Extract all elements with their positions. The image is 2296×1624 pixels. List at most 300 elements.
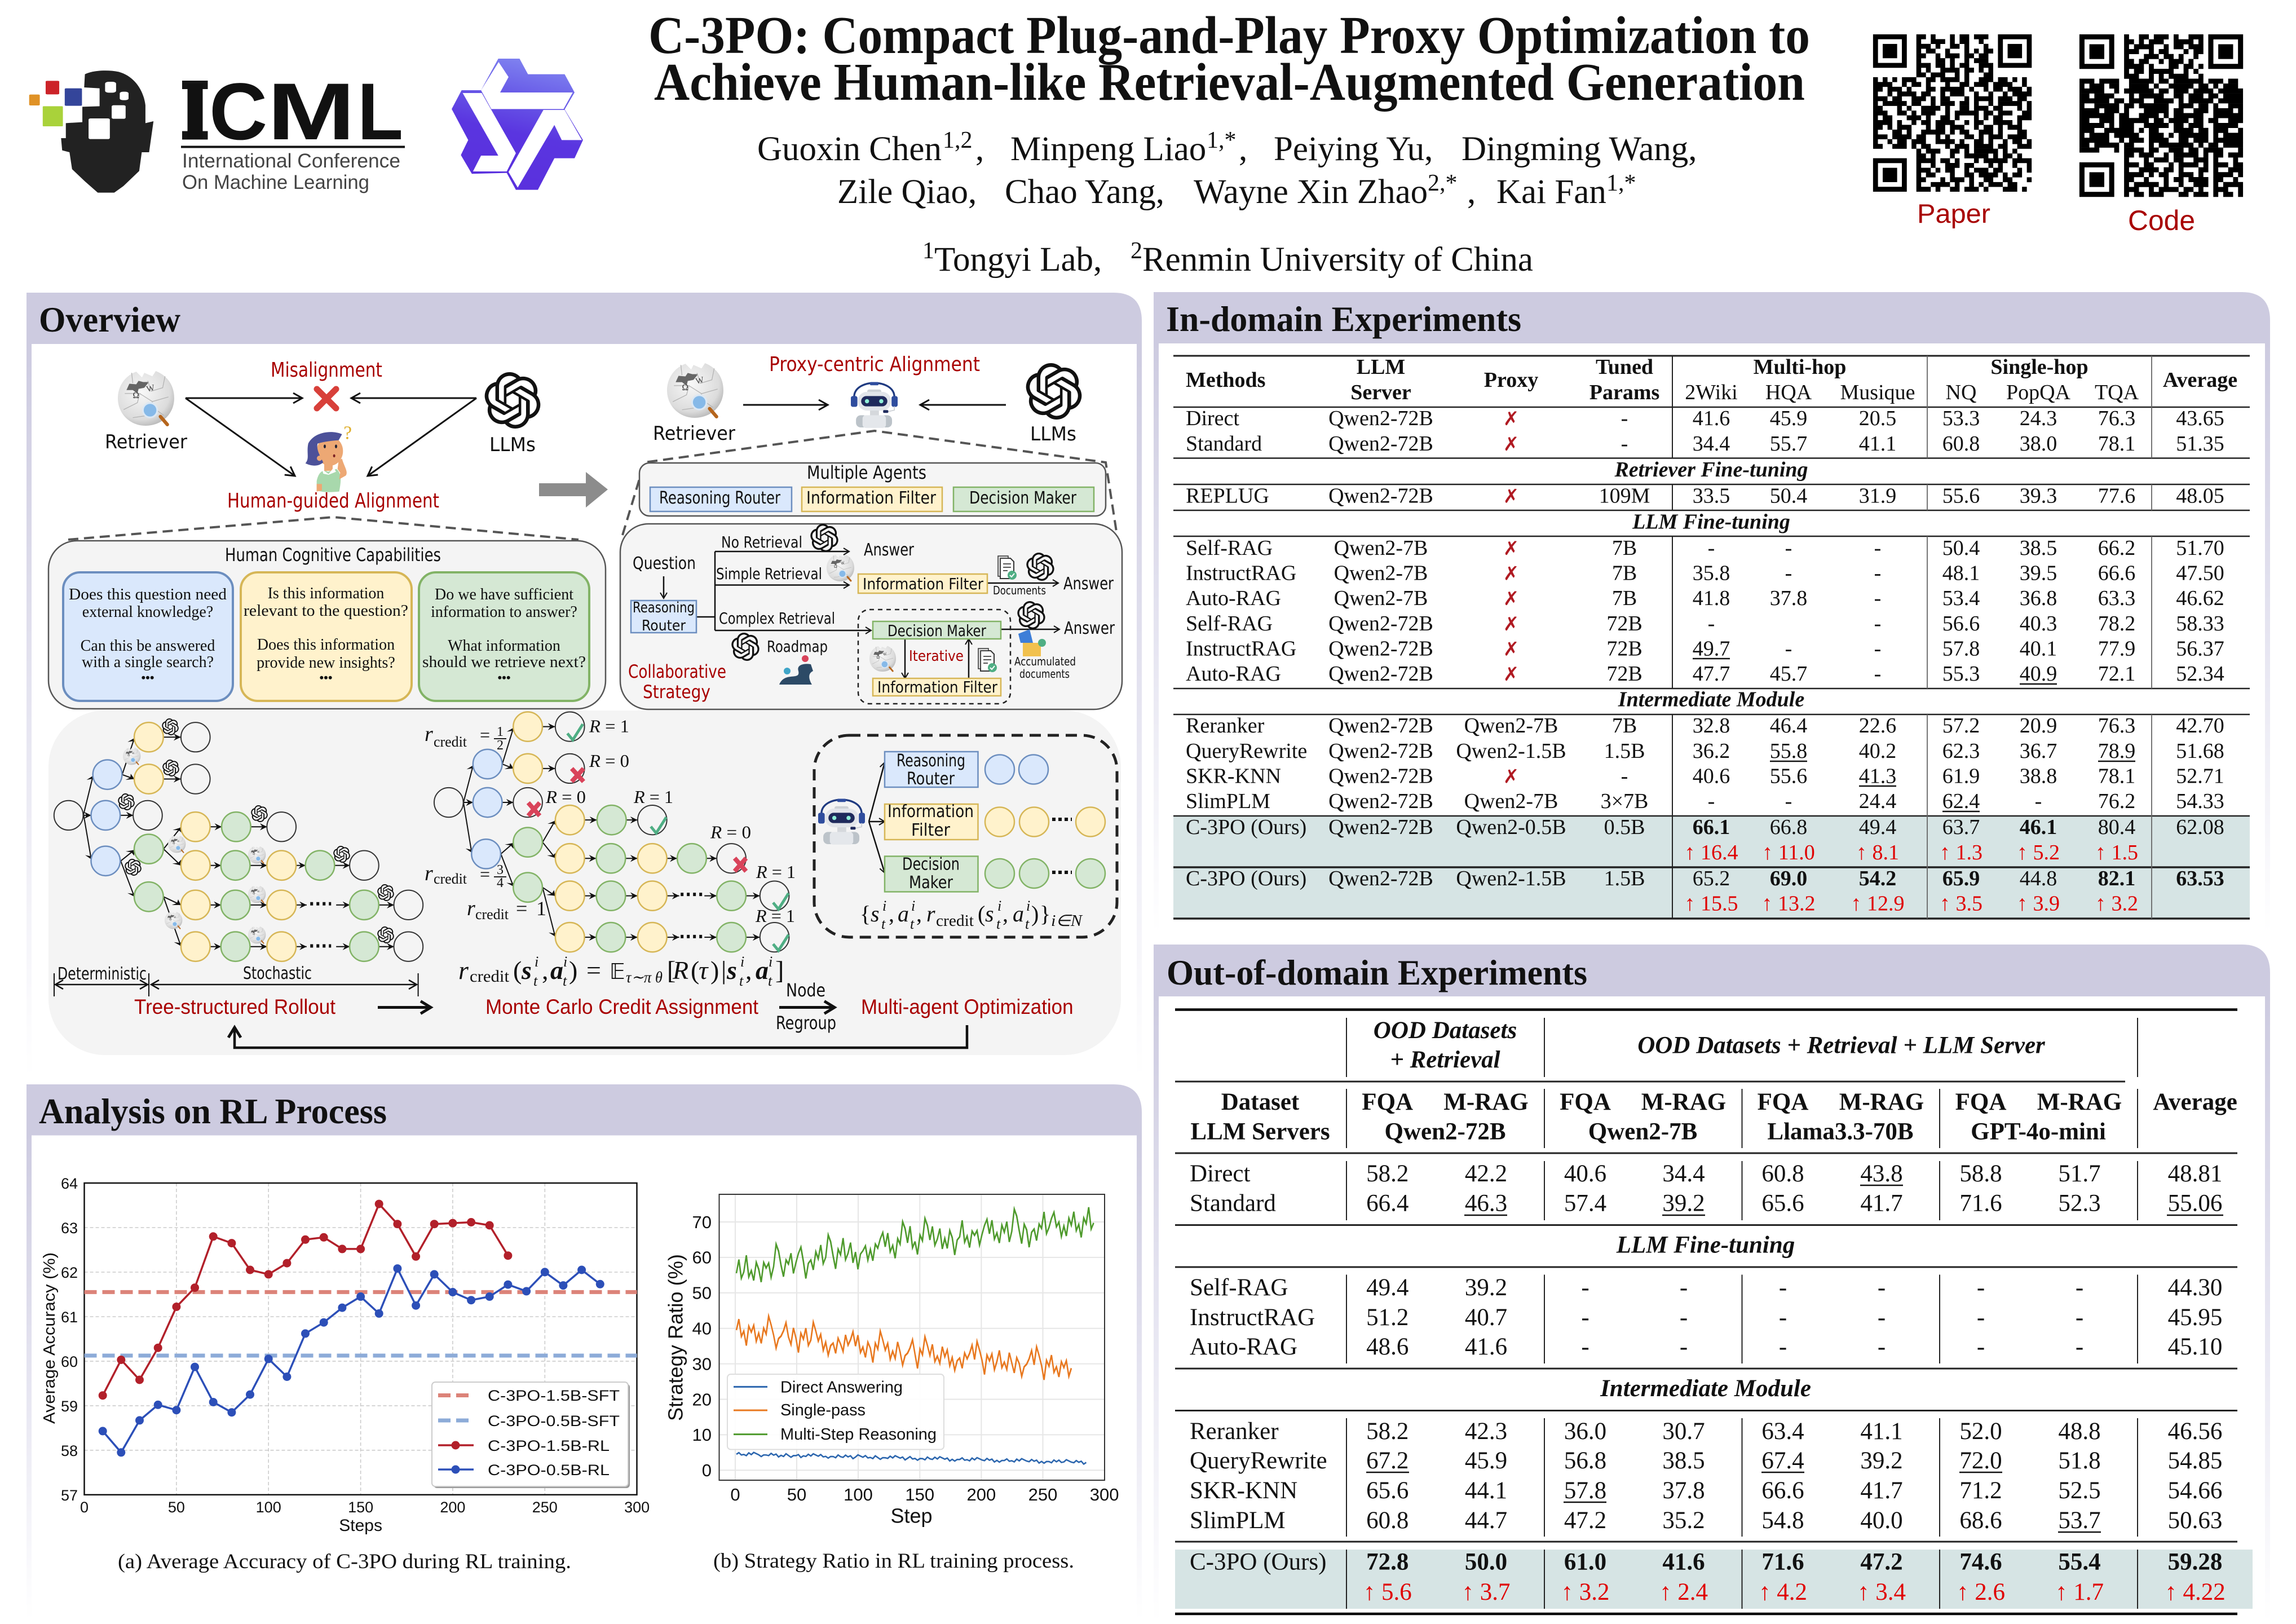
- rows: LLM fine-tuning: -: [1874, 562, 1881, 585]
- rows: LLM fine-tuning: 38.5: [2020, 536, 2057, 560]
- rows: LLM fine-tuning: 48.1: [1942, 562, 1980, 585]
- table: out-of-domain: [1175, 1009, 2253, 1614]
- row: C-3PO 1.5B: ↑ 3.9: [2017, 892, 2060, 916]
- row: C-3PO 0.5B: ↑ 1.3: [1940, 841, 1982, 864]
- rows: LLM fine-tuning: Qwen2-7B: [1334, 586, 1428, 610]
- rows: LLM fine-tuning: 72B: [1606, 662, 1642, 686]
- rows: baselines: 58.2: [1366, 1160, 1408, 1187]
- dashed callout right: [622, 431, 1117, 535]
- rows: baselines: 41.6: [1693, 407, 1730, 430]
- label: accumulated documents: [1014, 655, 1076, 681]
- rows: intermediate module: 53.7: [2058, 1507, 2101, 1534]
- affiliations: [922, 238, 1533, 279]
- rows: LLM fine-tuning: -: [1785, 536, 1792, 560]
- title: C-3PO: Compact Plug-and-Play Proxy Optimization to: [648, 6, 1810, 65]
- table column headers: Average: [2153, 1089, 2237, 1115]
- row: C-3PO 1.5B: 65.2: [1693, 867, 1730, 890]
- formula: agent data: ,: [1003, 901, 1008, 926]
- card: yellow: Does this information: [257, 636, 395, 654]
- box: reasoning router: Router: [907, 769, 955, 789]
- authors: ,: [1239, 130, 1247, 168]
- rows: LLM fine-tuning: ✗: [1503, 537, 1519, 560]
- formula: monte carlo credit: s: [521, 956, 532, 985]
- table header: Average: [2163, 368, 2237, 392]
- formula: agent data: a: [1013, 901, 1024, 926]
- formula: monte carlo credit: |: [721, 956, 726, 985]
- rows: baselines: 53.3: [1942, 407, 1980, 430]
- formula: monte carlo credit: i: [535, 954, 538, 970]
- rows: intermediate module: SlimPLM: [1190, 1507, 1286, 1534]
- rows: LLM fine-tuning: 72B: [1606, 612, 1642, 636]
- legend: strategies: [727, 1374, 944, 1449]
- rows: baselines: 45.9: [1770, 407, 1807, 430]
- row: REPLUG: 109M: [1599, 484, 1650, 508]
- label: accumulated documents: Accumulated: [1014, 655, 1076, 668]
- row: C-3PO 1.5B: 1.5B: [1604, 867, 1645, 890]
- formula: monte carlo credit: t: [563, 973, 567, 989]
- icon: documents lower: [978, 648, 997, 672]
- card: blue: external knowledge?: [82, 603, 213, 621]
- rows: LLM fine-tuning: -: [1878, 1274, 1886, 1301]
- authors: 1,2: [943, 127, 972, 153]
- baseline: 1.5B SFT: [85, 1290, 637, 1294]
- rows: LLM fine-tuning: 46.62: [2176, 586, 2224, 610]
- formula: monte carlo credit: [: [667, 956, 675, 985]
- title: [648, 6, 1810, 112]
- rows: LLM fine-tuning: ✗: [1503, 588, 1519, 610]
- rows: LLM fine-tuning: 53.4: [1942, 586, 1980, 610]
- rows: baselines: 51.7: [2058, 1160, 2101, 1187]
- rows: baselines: 24.3: [2020, 407, 2057, 430]
- axis ticks: 63: [61, 1220, 78, 1237]
- table header: 2Wiki: [1685, 381, 1738, 404]
- label: tree-structured rollout: Tree-structured Rollout: [134, 995, 336, 1018]
- rows: LLM fine-tuning: InstructRAG: [1190, 1304, 1315, 1331]
- rows: baselines: 60.8: [1761, 1160, 1804, 1187]
- rows: baselines: 20.5: [1859, 407, 1896, 430]
- label: iterative: Iterative: [909, 648, 964, 665]
- label: Misalignment: Misalignment: [271, 359, 382, 382]
- rows: baselines: Direct: [1186, 407, 1239, 430]
- formula: monte carlo credit: R: [672, 956, 688, 985]
- rows: LLM fine-tuning: Self-RAG: [1186, 536, 1273, 560]
- row: C-3PO 0.5B: 49.4: [1859, 815, 1896, 839]
- section: LLM fine-tuning: LLM Fine-tuning: [1632, 510, 1790, 533]
- rows: LLM fine-tuning: -: [1785, 637, 1792, 661]
- row: C-3PO 0.5B: 0.5B: [1604, 815, 1645, 839]
- label: Code: Code: [2128, 205, 2195, 236]
- row: C-3PO 1.5B: Qwen2-72B: [1328, 867, 1433, 890]
- heading: out-of-domain: Out-of-domain Experiments: [1167, 952, 1587, 992]
- formula: monte carlo credit: i: [563, 954, 567, 970]
- brackets: deterministic and stochastic: Stochastic: [243, 964, 312, 983]
- label: answer 2: Answer: [1063, 574, 1114, 594]
- rows: baselines: 39.2: [1662, 1190, 1705, 1217]
- formula: monte carlo credit: a: [550, 956, 563, 985]
- row: C-3PO: 72.8: [1366, 1548, 1408, 1576]
- heading: Overview: Overview: [39, 299, 180, 339]
- authors: ,: [1467, 173, 1476, 211]
- rows: intermediate module: 36.2: [1693, 739, 1730, 763]
- axis ticks: [692, 1212, 1119, 1504]
- axis ticks: 70: [692, 1212, 712, 1232]
- formula: monte carlo credit: r: [458, 956, 469, 985]
- formula: agent data: t: [881, 916, 886, 932]
- rows: baselines: 78.1: [2098, 432, 2135, 456]
- rows: LLM fine-tuning: -: [1779, 1304, 1787, 1331]
- row: C-3PO 0.5B: 62.08: [2176, 815, 2224, 839]
- rows: baselines: Standard: [1186, 432, 1262, 456]
- panel: in-domain experiments: [1154, 292, 2270, 933]
- table column headers: Dataset: [1221, 1089, 1300, 1115]
- table column headers: LLM Servers: [1190, 1119, 1330, 1145]
- axis ticks: 62: [61, 1264, 78, 1281]
- rows: intermediate module: 44.1: [1465, 1477, 1507, 1504]
- icon: red cross: [317, 389, 336, 408]
- rows: baselines: Qwen2-72B: [1328, 432, 1433, 456]
- rows: LLM fine-tuning: -: [1708, 536, 1715, 560]
- row: C-3PO: 47.2: [1860, 1548, 1903, 1576]
- rows: LLM fine-tuning: Self-RAG: [1190, 1274, 1288, 1301]
- axis title: strategy ratio: Strategy Ratio (%): [664, 1254, 687, 1421]
- table column headers: [1190, 1089, 2237, 1145]
- row: C-3PO: ↑ 2.4: [1659, 1579, 1708, 1605]
- rows: LLM fine-tuning: 45.10: [2168, 1334, 2222, 1360]
- table column headers: GPT-4o-mini: [1971, 1119, 2106, 1145]
- panel: collaborative strategy: [620, 524, 1122, 709]
- row: C-3PO 1.5B: 44.8: [2020, 867, 2057, 890]
- table header: Single-hop: [1990, 355, 2089, 379]
- card: blue: [63, 572, 233, 701]
- box: information filter lower: Information Filter: [877, 678, 997, 696]
- axis ticks: 40: [692, 1318, 712, 1339]
- axis ticks: 58: [61, 1442, 78, 1459]
- card: green: information to answer?: [431, 603, 577, 621]
- rows: LLM fine-tuning: -: [1977, 1334, 1985, 1360]
- rows: LLM fine-tuning: 41.6: [1465, 1334, 1507, 1360]
- row: C-3PO: ↑ 4.22: [2165, 1579, 2226, 1605]
- authors: Chao Yang,: [1005, 173, 1164, 211]
- rows: baselines: 60.8: [1942, 432, 1980, 456]
- rows: LLM fine-tuning: 7B: [1612, 562, 1637, 585]
- rows: intermediate module: 40.2: [1859, 739, 1896, 763]
- row: C-3PO 0.5B: 80.4: [2098, 815, 2135, 839]
- table column headers: FQA: [1758, 1089, 1808, 1115]
- axis ticks: 60: [61, 1353, 78, 1370]
- rows: intermediate module: 36.7: [2020, 739, 2057, 763]
- formula: monte carlo credit: 𝔼: [610, 959, 625, 984]
- axis ticks: 30: [692, 1354, 712, 1374]
- title: Achieve Human-like Retrieval-Augmented Generation: [654, 53, 1805, 112]
- axis ticks: [61, 1175, 650, 1516]
- authors: Guoxin Chen: [757, 130, 942, 168]
- axis ticks: 57: [61, 1487, 78, 1504]
- labels: credit values: [425, 722, 546, 923]
- row: C-3PO: C-3PO (Ours): [1190, 1548, 1326, 1576]
- brackets: deterministic and stochastic: Deterministic: [58, 964, 147, 984]
- rows: intermediate module: [1190, 1418, 2222, 1534]
- label: complex retrieval: Complex Retrieval: [719, 609, 835, 628]
- box: reasoning router: [650, 487, 792, 511]
- rows: LLM fine-tuning: 63.3: [2098, 586, 2135, 610]
- row: C-3PO 1.5B: [1186, 867, 2224, 916]
- rows: LLM fine-tuning: 52.34: [2176, 662, 2224, 686]
- rows: intermediate module: 35.2: [1662, 1507, 1705, 1534]
- rows: LLM fine-tuning: 55.3: [1942, 662, 1980, 686]
- rows: LLM fine-tuning: 40.1: [2020, 637, 2057, 661]
- table column headers: Qwen2-7B: [1588, 1119, 1697, 1145]
- row: REPLUG: 31.9: [1859, 484, 1896, 508]
- row: REPLUG: 50.4: [1770, 484, 1807, 508]
- box: reasoning router small: Router: [642, 617, 686, 634]
- rows: LLM fine-tuning: [1186, 536, 2224, 686]
- axis ticks: 100: [844, 1485, 873, 1504]
- rows: intermediate module: Reranker: [1186, 714, 1265, 738]
- label: documents: Documents: [993, 584, 1046, 597]
- axis ticks: 0: [730, 1485, 740, 1504]
- rows: LLM fine-tuning: 78.2: [2098, 612, 2135, 636]
- row: C-3PO: 61.0: [1564, 1548, 1606, 1576]
- rows: intermediate module: 48.8: [2058, 1418, 2101, 1445]
- rows: intermediate module: 41.1: [1860, 1418, 1903, 1445]
- rows: LLM fine-tuning: Qwen2-7B: [1334, 536, 1428, 560]
- table column headers: Qwen2-72B: [1385, 1119, 1505, 1145]
- card: yellow: [241, 572, 412, 701]
- rows: baselines: ✗: [1503, 433, 1519, 456]
- labels: reward values: R = 1: [633, 787, 673, 807]
- formula: agent data: t: [996, 916, 1001, 932]
- rows: baselines: 52.3: [2058, 1190, 2101, 1217]
- label: roadmap: Roadmap: [767, 637, 828, 656]
- icon: retriever small: [827, 555, 854, 581]
- box: information filter: [885, 802, 978, 840]
- rows: LLM fine-tuning: Auto-RAG: [1186, 586, 1281, 610]
- authors: Zile Qiao,: [837, 173, 977, 211]
- box: decision maker small: Decision Maker: [888, 621, 986, 640]
- card: blue: Does this question need: [69, 586, 227, 603]
- rows: LLM fine-tuning: InstructRAG: [1186, 562, 1296, 585]
- table group headers: OOD Datasets + Retrieval + LLM Server: [1637, 1032, 2046, 1059]
- box: information filter: Information Filter: [806, 488, 937, 508]
- card: green: •••: [497, 670, 511, 685]
- legend: accuracy: C-3PO-1.5B-RL: [488, 1437, 610, 1454]
- rows: LLM fine-tuning: -: [1874, 662, 1881, 686]
- row: C-3PO 0.5B: 46.1: [2020, 815, 2057, 839]
- authors: [757, 127, 1697, 211]
- label: simple retrieval: Simple Retrieval: [716, 564, 822, 583]
- rows: LLM fine-tuning: ✗: [1503, 638, 1519, 661]
- panel: optimization pipeline: [48, 710, 1121, 1055]
- formula: monte carlo credit: ,: [745, 956, 752, 985]
- rows: LLM fine-tuning: 41.8: [1693, 586, 1730, 610]
- rows: baselines: 40.6: [1564, 1160, 1606, 1187]
- table header: Musique: [1840, 381, 1915, 404]
- row: C-3PO 1.5B: Qwen2-1.5B: [1456, 867, 1566, 890]
- row: C-3PO 1.5B: 54.2: [1859, 867, 1896, 890]
- table column headers: FQA: [1955, 1089, 2006, 1115]
- rows: LLM fine-tuning: -: [2076, 1334, 2083, 1360]
- rows: baselines: 41.1: [1859, 432, 1896, 456]
- rows: intermediate module: 41.7: [1860, 1477, 1903, 1504]
- arrows: strategy: [664, 551, 1059, 678]
- rows: LLM fine-tuning: -: [1785, 562, 1792, 585]
- formula: monte carlo credit: i: [769, 954, 772, 970]
- rows: intermediate module: 46.56: [2168, 1418, 2222, 1445]
- card: yellow: Is this information: [268, 585, 384, 602]
- row: C-3PO: 55.4: [2058, 1548, 2101, 1576]
- caption b: (b) Strategy Ratio in RL training process.: [713, 1550, 1074, 1573]
- heading: multiple agents: Multiple Agents: [807, 462, 926, 483]
- labels: credit values: 3: [497, 863, 504, 877]
- table column headers: M-RAG: [1443, 1089, 1529, 1115]
- axis ticks: 50: [692, 1283, 712, 1303]
- rows: intermediate module: 37.8: [1662, 1477, 1705, 1504]
- rows: baselines: -: [1621, 407, 1628, 430]
- legend: accuracy: C-3PO-0.5B-RL: [488, 1462, 610, 1479]
- formula: agent data: i: [997, 898, 1001, 914]
- table group headers: OOD Datasets: [1374, 1017, 1517, 1044]
- axis ticks: 0: [702, 1460, 712, 1480]
- tree: structured rollout: [54, 722, 423, 961]
- QR code: paper: [1873, 37, 2032, 189]
- arrow: node regroup: [776, 979, 836, 1034]
- icon: retriever left: [118, 371, 174, 426]
- series: single-pass: [736, 1312, 1071, 1382]
- section: LLM fine-tuning: LLM Fine-tuning: [1616, 1232, 1795, 1259]
- rows: LLM fine-tuning: -: [1878, 1334, 1886, 1360]
- formula: monte carlo credit: τ∼π θ: [626, 969, 663, 986]
- heading: analysis: Analysis on RL Process: [39, 1091, 387, 1131]
- axis ticks: 50: [787, 1485, 806, 1504]
- axis ticks: 100: [256, 1499, 281, 1516]
- rows: LLM fine-tuning: -: [2076, 1304, 2083, 1331]
- rows: LLM fine-tuning: 48.6: [1366, 1334, 1408, 1360]
- axis ticks: 250: [1028, 1485, 1057, 1504]
- arrows: left triangle: [186, 398, 476, 476]
- heading: in-domain: In-domain Experiments: [1166, 299, 1521, 339]
- arrow: big gray: [539, 472, 608, 508]
- table column headers: M-RAG: [1839, 1089, 1924, 1115]
- icon: human: ?: [343, 422, 352, 443]
- legend: strategies: Single-pass: [780, 1401, 866, 1419]
- labels: reward values: R = 1: [755, 906, 795, 926]
- label: Paper: Paper: [1917, 198, 1990, 228]
- series: multi-step reasoning: [736, 1201, 1094, 1291]
- formula: agent data: ): [1031, 901, 1039, 926]
- formula: agent data: {: [860, 901, 871, 926]
- formula: monte carlo credit: t: [739, 973, 744, 989]
- axis ticks: 59: [61, 1398, 78, 1415]
- rows: intermediate module: 45.9: [1465, 1448, 1507, 1474]
- rows: intermediate module: 55.6: [1770, 765, 1807, 788]
- panel header: overview: [27, 293, 1142, 344]
- rows: intermediate module: 38.5: [1662, 1448, 1705, 1474]
- rows: LLM fine-tuning: 51.2: [1366, 1304, 1408, 1331]
- row: C-3PO 1.5B: ↑ 3.5: [1940, 892, 1982, 916]
- row: C-3PO 1.5B: 69.0: [1770, 867, 1807, 890]
- formula: agent data: s: [985, 901, 994, 926]
- icon: roadmap: [779, 655, 813, 685]
- rows: baselines: 41.7: [1860, 1190, 1903, 1217]
- rows: baselines: Standard: [1190, 1190, 1276, 1217]
- rows: intermediate module: 32.8: [1693, 714, 1730, 738]
- rows: intermediate module: 76.2: [2098, 789, 2135, 813]
- formula: monte carlo credit: ,: [542, 956, 548, 985]
- rows: LLM fine-tuning: 45.7: [1770, 662, 1807, 686]
- formula: monte carlo credit: ]: [775, 956, 784, 985]
- authors: Minpeng Liao: [1010, 130, 1206, 168]
- rows: baselines: 66.4: [1366, 1190, 1408, 1217]
- icon: retriever small lower: [869, 646, 896, 672]
- rows: LLM fine-tuning: Qwen2-72B: [1328, 662, 1433, 686]
- table header: [1186, 355, 2237, 404]
- rows: intermediate module: 65.6: [1366, 1477, 1408, 1504]
- table column headers: FQA: [1560, 1089, 1611, 1115]
- rows: intermediate module: 66.6: [1761, 1477, 1804, 1504]
- rows: LLM fine-tuning: -: [1581, 1334, 1589, 1360]
- brackets: deterministic and stochastic: [54, 964, 418, 996]
- table header: NQ: [1946, 381, 1976, 404]
- authors: 2,*: [1428, 170, 1457, 196]
- row: REPLUG: 39.3: [2020, 484, 2057, 508]
- box: reasoning router small: [631, 599, 696, 634]
- axis ticks: 250: [532, 1499, 558, 1516]
- table header: Server: [1350, 381, 1411, 404]
- rows: baselines: 51.35: [2176, 432, 2224, 456]
- label: Proxy-centric Alignment: Proxy-centric Alignment: [769, 353, 980, 376]
- dashed iteration box: [858, 610, 1010, 704]
- row: C-3PO 1.5B: 82.1: [2098, 867, 2135, 890]
- rows: intermediate module: SKR-KNN: [1190, 1477, 1297, 1504]
- label: LLMs right: LLMs: [1030, 423, 1076, 445]
- row: REPLUG: [1186, 484, 2224, 508]
- legend: accuracy: C-3PO-0.5B-SFT: [488, 1413, 620, 1429]
- table header: Tuned: [1596, 355, 1653, 379]
- rows: LLM fine-tuning: -: [1680, 1304, 1688, 1331]
- rows: LLM fine-tuning: 72.1: [2098, 662, 2135, 686]
- card: green: [419, 572, 589, 701]
- rows: LLM fine-tuning: -: [1779, 1274, 1787, 1301]
- axis ticks: 60: [692, 1247, 712, 1268]
- icon: human: [306, 422, 352, 492]
- chart: strategy ratio: [664, 1194, 1119, 1528]
- rows: LLM fine-tuning: -: [1874, 536, 1881, 560]
- rows: baselines: 65.6: [1761, 1190, 1804, 1217]
- icon: robot agent: [818, 798, 865, 845]
- rows: intermediate module: 57.2: [1942, 714, 1980, 738]
- label: Human-guided Alignment: Human-guided Alignment: [227, 489, 439, 513]
- rows: baselines: [1190, 1160, 2222, 1217]
- row: C-3PO 0.5B: ↑ 5.2: [2017, 841, 2060, 864]
- card: green: should we retrieve next?: [422, 654, 586, 671]
- rows: intermediate module: 54.66: [2168, 1477, 2222, 1504]
- label: collaborative strategy: Strategy: [643, 681, 710, 703]
- authors: ,: [975, 130, 984, 168]
- rows: intermediate module: 55.8: [1770, 739, 1807, 763]
- table column headers: Llama3.3-70B: [1767, 1119, 1914, 1145]
- baseline: 0.5B SFT: [85, 1353, 637, 1358]
- rows: baselines: 46.3: [1465, 1190, 1507, 1217]
- rows: baselines: Direct: [1190, 1160, 1250, 1187]
- table: in-domain: [1173, 355, 2250, 919]
- label: LLMs: LLMs: [489, 434, 536, 456]
- rows: intermediate module: 62.3: [1942, 739, 1980, 763]
- label: question: Question: [633, 554, 696, 573]
- QR code: code: [2079, 37, 2243, 195]
- row: C-3PO: 41.6: [1662, 1548, 1705, 1576]
- formula: agent data: t: [910, 916, 915, 932]
- row: REPLUG: Qwen2-72B: [1328, 484, 1433, 508]
